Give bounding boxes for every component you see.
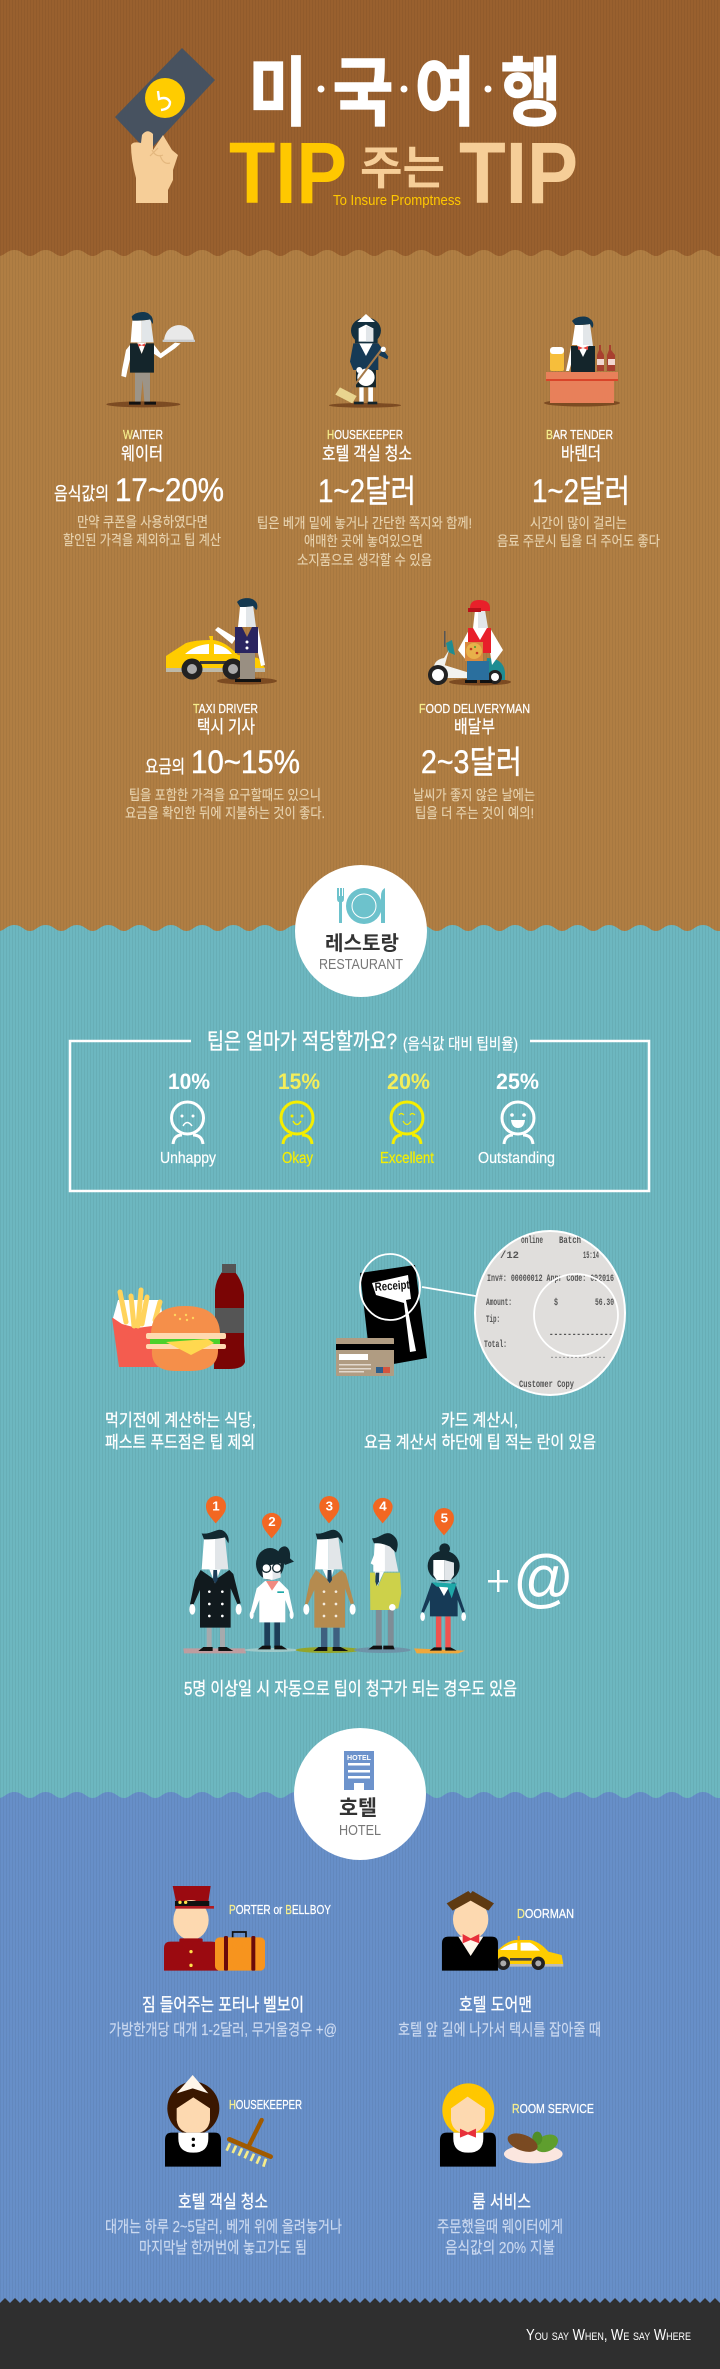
rating: 15% okay: 15% bbox=[278, 1069, 320, 1094]
person 5 bbox=[414, 1508, 466, 1653]
icon: plus at sign: @ bbox=[513, 1542, 574, 1614]
figure: housekeeper bbox=[329, 314, 401, 408]
text: room service: 주문했을때 웨이터에게 bbox=[437, 2218, 563, 2236]
text: taxi driver: 택시 기사 bbox=[197, 717, 255, 737]
person 3: 3 bbox=[326, 1499, 333, 1514]
person 1: 1 bbox=[212, 1499, 220, 1514]
badge: hotel: HOTEL bbox=[339, 1823, 381, 1839]
text: bartender: 1~2달러 bbox=[532, 473, 630, 509]
text: waiter bbox=[54, 427, 224, 548]
text: room service: 음식값의 20% 지불 bbox=[445, 2239, 555, 2257]
chart: magnified receipt detail: -------------- bbox=[549, 1330, 613, 1341]
icon: receipt folder with card bbox=[336, 1254, 535, 1376]
panel: tip percentage box bbox=[70, 1029, 649, 1191]
text: waiter: 웨이터 bbox=[121, 444, 163, 464]
person 2 bbox=[244, 1513, 299, 1652]
chart: magnified receipt detail: Total: bbox=[484, 1339, 507, 1351]
text: waiter: WAITER bbox=[123, 427, 163, 442]
chart: magnified receipt detail: online bbox=[521, 1235, 543, 1247]
badge: hotel: HOTEL bbox=[347, 1755, 372, 1762]
text: bartender: 음료 주문시 팁을 더 주어도 좋다 bbox=[497, 533, 660, 549]
text: housekeeper: 1~2달러 bbox=[318, 473, 416, 509]
text: porter: 짐 들어주는 포터나 벨보이 bbox=[142, 1995, 304, 2015]
chart: magnified receipt detail: Tip: bbox=[486, 1314, 500, 1326]
subtitle: TIP 주는 TIP: 주는 bbox=[360, 142, 445, 194]
text: taxi driver bbox=[125, 701, 325, 821]
text: waiter: 17~20% bbox=[115, 472, 224, 508]
person 4 bbox=[354, 1498, 411, 1653]
badge: restaurant: RESTAURANT bbox=[319, 957, 403, 973]
text: food deliveryman: FOOD DELIVERYMAN bbox=[419, 701, 530, 716]
chart: magnified receipt detail: 15:14 bbox=[583, 1251, 599, 1262]
chart: magnified receipt detail: Batch bbox=[559, 1235, 581, 1247]
icon: hotel housekeeper bbox=[165, 2075, 271, 2167]
caption: fast food bbox=[105, 1411, 256, 1452]
icon: fast food bbox=[112, 1264, 245, 1371]
heading: how much to tip: 팁은 얼마가 적당할까요? bbox=[207, 1029, 397, 1054]
caption: card payment: 카드 계산시, bbox=[441, 1411, 518, 1430]
rating: 15% okay: Okay bbox=[282, 1150, 313, 1167]
title: 행 bbox=[501, 51, 561, 135]
badge: restaurant bbox=[295, 865, 427, 997]
rating: 10% unhappy: 10% bbox=[168, 1069, 210, 1094]
figure: delivery man with scooter bbox=[428, 600, 511, 686]
chart: magnified receipt detail: Amount: bbox=[486, 1298, 512, 1309]
caption: card payment: 요금 계산서 하단에 팁 적는 란이 있음 bbox=[364, 1433, 596, 1452]
text: taxi driver: TAXI DRIVER bbox=[193, 701, 258, 716]
text: housekeeper: 호텔 객실 청소 bbox=[322, 444, 412, 464]
figure: taxi driver bbox=[166, 598, 277, 684]
person 1 bbox=[183, 1496, 246, 1653]
subtitle: TIP 주는 TIP: To Insure Promptness bbox=[333, 192, 461, 209]
text: hotel housekeeper bbox=[105, 2192, 342, 2257]
text: bartender bbox=[497, 427, 660, 549]
text: taxi driver: 요금을 확인한 뒤에 지불하는 것이 좋다. bbox=[125, 805, 325, 821]
text: porter bbox=[109, 1995, 337, 2039]
chart: magnified receipt detail: Inv#: 00000012 Appr Code: 092016 bbox=[487, 1273, 614, 1285]
rating: 10% unhappy bbox=[160, 1069, 216, 1167]
figure: bartender bbox=[544, 317, 620, 406]
chart: magnified receipt detail: /12 bbox=[500, 1250, 519, 1262]
text: housekeeper: HOUSEKEEPER bbox=[327, 427, 403, 442]
person 5: 5 bbox=[441, 1511, 449, 1526]
title: 미 bbox=[249, 51, 307, 135]
text: doorman: 호텔 도어맨 bbox=[459, 1995, 532, 2015]
figure: waiter bbox=[106, 312, 195, 407]
text: housekeeper: 소지품으로 생각할 수 있음 bbox=[297, 552, 432, 568]
icon: hand holding banknote bbox=[115, 48, 215, 203]
chart: magnified receipt detail: 56.30 bbox=[595, 1298, 614, 1309]
rating: 25% outstanding: Outstanding bbox=[478, 1150, 555, 1167]
chart: magnified receipt detail: -------------- bbox=[550, 1353, 606, 1364]
text: taxi driver: 요금의 bbox=[145, 757, 185, 777]
rating: 25% outstanding bbox=[478, 1069, 555, 1167]
text: waiter: 만약 쿠폰을 사용하였다면 bbox=[77, 514, 208, 530]
badge: restaurant: 레스토랑 bbox=[325, 932, 399, 955]
chart: magnified receipt detail: $ bbox=[554, 1297, 558, 1309]
chart: magnified receipt detail bbox=[475, 1231, 625, 1395]
figure group: five people with pins bbox=[183, 1496, 466, 1653]
text: taxi driver: 팁을 포함한 가격을 요구할때도 있으니 bbox=[129, 787, 321, 803]
person 3 bbox=[296, 1496, 361, 1653]
rating: 20% excellent bbox=[380, 1069, 434, 1167]
label: porter or bellboy: PORTER or BELLBOY bbox=[229, 1902, 331, 1917]
badge: hotel bbox=[294, 1728, 426, 1860]
sub-heading: ratio note: (음식값 대비 팁비율) bbox=[403, 1035, 518, 1053]
rating: 10% unhappy: Unhappy bbox=[160, 1150, 216, 1167]
rating: 25% outstanding: 25% bbox=[496, 1069, 539, 1094]
text: food deliveryman: 팁을 더 주는 것이 예의! bbox=[415, 805, 534, 821]
subtitle: TIP 주는 TIP bbox=[229, 125, 578, 222]
subtitle: TIP 주는 TIP: TIP bbox=[229, 125, 347, 222]
text: food deliveryman: 날씨가 좋지 않은 날에는 bbox=[413, 787, 535, 803]
text: waiter: 할인된 가격을 제외하고 팁 계산 bbox=[63, 532, 221, 548]
icon: plus at sign bbox=[488, 1542, 574, 1614]
icon: porter bbox=[164, 1886, 265, 1971]
caption: card payment bbox=[364, 1411, 596, 1452]
text: taxi driver: 10~15% bbox=[191, 744, 300, 780]
label: doorman: DOORMAN bbox=[517, 1906, 574, 1921]
caption: five or more people: 5명 이상일 시 자동으로 팁이 청구가 되는 경우도 있음 bbox=[184, 1679, 517, 1699]
badge: hotel: 호텔 bbox=[339, 1797, 377, 1820]
label: housekeeper: HOUSEKEEPER bbox=[229, 2097, 302, 2112]
text: room service: 룸 서비스 bbox=[472, 2192, 531, 2212]
chart: magnified receipt detail: Customer Copy bbox=[519, 1380, 574, 1391]
text: doorman bbox=[398, 1995, 601, 2039]
text: waiter: 음식값의 bbox=[54, 484, 109, 504]
text: food deliveryman: 배달부 bbox=[454, 717, 495, 737]
text: food deliveryman bbox=[413, 701, 535, 821]
text: housekeeper: 팁은 베개 밑에 놓거나 간단한 쪽지와 함께! bbox=[257, 515, 472, 531]
text: housekeeper bbox=[257, 427, 472, 568]
title: 여 bbox=[415, 51, 475, 135]
person 2: 2 bbox=[268, 1514, 276, 1529]
text: bartender: BAR TENDER bbox=[546, 427, 613, 442]
title: 국 bbox=[333, 51, 393, 135]
label: room service: ROOM SERVICE bbox=[512, 2101, 594, 2116]
person 4: 4 bbox=[379, 1499, 387, 1514]
text: hotel housekeeper: 마지막날 한꺼번에 놓고가도 됨 bbox=[139, 2239, 307, 2257]
rating: 15% okay bbox=[278, 1069, 320, 1167]
icon: room service bbox=[440, 2083, 563, 2167]
text: doorman: 호텔 앞 길에 나가서 택시를 잡아줄 때 bbox=[398, 2021, 601, 2039]
text: room service bbox=[437, 2192, 563, 2257]
text: housekeeper: 애매한 곳에 놓여있으면 bbox=[304, 533, 423, 549]
rating: 20% excellent: Excellent bbox=[380, 1150, 434, 1167]
icon: doorman bbox=[442, 1891, 563, 1971]
subtitle: TIP 주는 TIP: TIP bbox=[459, 125, 578, 222]
text: bartender: 시간이 많이 걸리는 bbox=[530, 515, 627, 531]
text: porter: 가방한개당 대개 1-2달러, 무거울경우 +@ bbox=[109, 2021, 337, 2039]
text: hotel housekeeper: 호텔 객실 청소 bbox=[178, 2192, 268, 2212]
caption: fast food: 먹기전에 계산하는 식당, bbox=[105, 1411, 256, 1430]
text: bartender: 바텐더 bbox=[561, 444, 601, 464]
title bbox=[249, 51, 561, 135]
text: food deliveryman: 2~3달러 bbox=[421, 744, 522, 780]
rating: 20% excellent: 20% bbox=[387, 1069, 430, 1094]
icon: receipt folder with card: Receipt bbox=[374, 1278, 410, 1294]
caption: fast food: 패스트 푸드점은 팁 제외 bbox=[105, 1433, 255, 1452]
text: hotel housekeeper: 대개는 하루 2~5달러, 베개 위에 올려놓거나 bbox=[105, 2218, 342, 2236]
